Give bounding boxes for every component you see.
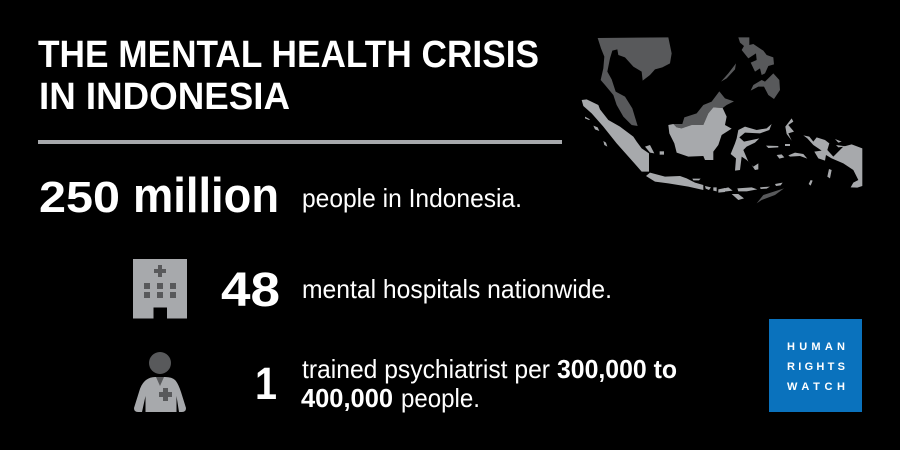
title: THE MENTAL HEALTH CRISIS <box>38 34 539 76</box>
stat: population: million <box>133 169 279 223</box>
stat: mental hospitals: mental hospitals nationwide. <box>302 274 612 304</box>
stat: psychiatrists: 1 <box>255 358 277 409</box>
stat: mental hospitals <box>221 264 612 317</box>
stat: population: people in Indonesia. <box>302 183 522 213</box>
stat: mental hospitals: 48 <box>221 264 280 317</box>
stat: population: 250 <box>39 173 120 222</box>
title: IN INDONESIA <box>39 76 290 118</box>
icon: hospital <box>133 259 187 318</box>
icon: psychiatrist <box>134 352 186 412</box>
stat: population <box>39 169 522 223</box>
stat: psychiatrists: 300,000 to <box>557 354 677 384</box>
title <box>38 34 539 118</box>
map: Sumatra, Kalimantan and Java <box>582 99 732 193</box>
stat: psychiatrists <box>255 354 677 413</box>
logo: Human Rights Watch: WATCH <box>787 381 845 393</box>
stat: psychiatrists: people. <box>401 383 480 413</box>
map: Philippines and Timor-Leste <box>721 37 784 203</box>
map of Southeast Asia <box>582 37 862 203</box>
logo: Human Rights Watch: HUMAN <box>787 341 845 353</box>
logo: Human Rights Watch <box>769 319 862 412</box>
logo: Human Rights Watch: RIGHTS <box>787 361 845 373</box>
map: mainland Southeast Asia and north Borneo <box>598 37 734 128</box>
stat: psychiatrists: trained psychiatrist per <box>302 354 550 384</box>
map: eastern Indonesian islands <box>720 118 862 200</box>
stat: psychiatrists: 400,000 <box>301 383 393 413</box>
